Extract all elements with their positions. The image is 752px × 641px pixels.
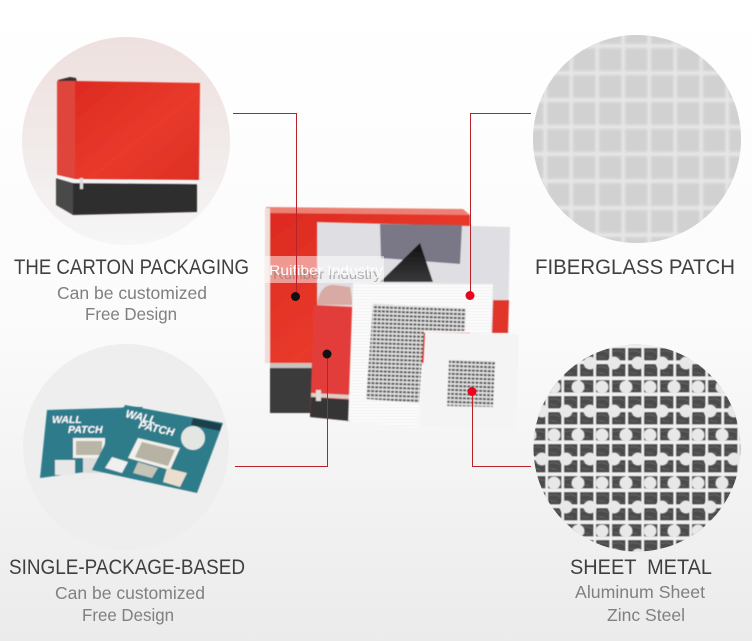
marker: fiberglass dot bbox=[466, 291, 474, 300]
icon: large wall patch bbox=[348, 283, 493, 428]
text: sheet metal note line 1: Aluminum Sheet bbox=[575, 582, 705, 602]
text: single package note line 2: Free Design bbox=[82, 605, 174, 625]
marker: carton dot bbox=[291, 292, 300, 301]
icon: front wall patch package: WALL bbox=[124, 408, 158, 427]
heading: carton packaging: THE CARTON PACKAGING bbox=[14, 256, 249, 279]
panel: fiberglass patch photo bbox=[530, 32, 745, 246]
icon: red package card bbox=[310, 305, 354, 421]
watermark: Ruifiber Industry bbox=[269, 262, 383, 278]
icon: back wall patch package: WALL bbox=[52, 414, 82, 426]
marker: sheet metal dot bbox=[468, 387, 476, 396]
icon: back wall patch package: PATCH bbox=[68, 424, 103, 436]
connector: sheet metal bbox=[472, 391, 531, 466]
icon: carton box bbox=[265, 207, 470, 413]
icon: front wall patch package bbox=[92, 405, 223, 493]
icon: carton box bbox=[56, 77, 200, 215]
text: single package note line 1: Can be customized bbox=[55, 583, 205, 603]
watermark: Ruifiber Industry bbox=[273, 266, 381, 282]
text: carton note line 2: Free Design bbox=[85, 304, 177, 324]
panel: single package photo bbox=[23, 344, 229, 550]
heading: sheet metal: SHEET METAL bbox=[570, 556, 712, 579]
text: sheet metal note line 2: Zinc Steel bbox=[607, 605, 685, 625]
panel: central product photo bbox=[265, 207, 519, 431]
icon: front wall patch package: PATCH bbox=[137, 419, 176, 439]
heading: single package: SINGLE-PACKAGE-BASED bbox=[9, 556, 245, 579]
connector: carton packaging bbox=[233, 114, 296, 296]
marker: single package dot bbox=[322, 350, 332, 358]
watermark bbox=[265, 256, 384, 283]
icon: instruction card bbox=[317, 222, 510, 333]
icon: small wall patch bbox=[420, 332, 519, 431]
connector: single package bbox=[235, 354, 328, 466]
panel: carton packaging photo bbox=[22, 37, 230, 245]
connector: fiberglass patch bbox=[470, 114, 531, 295]
heading: fiberglass patch: FIBERGLASS PATCH bbox=[535, 256, 735, 279]
text: carton note line 1: Can be customized bbox=[57, 283, 207, 303]
panel: sheet metal photo bbox=[530, 344, 744, 554]
icon: back wall patch package bbox=[40, 407, 143, 478]
